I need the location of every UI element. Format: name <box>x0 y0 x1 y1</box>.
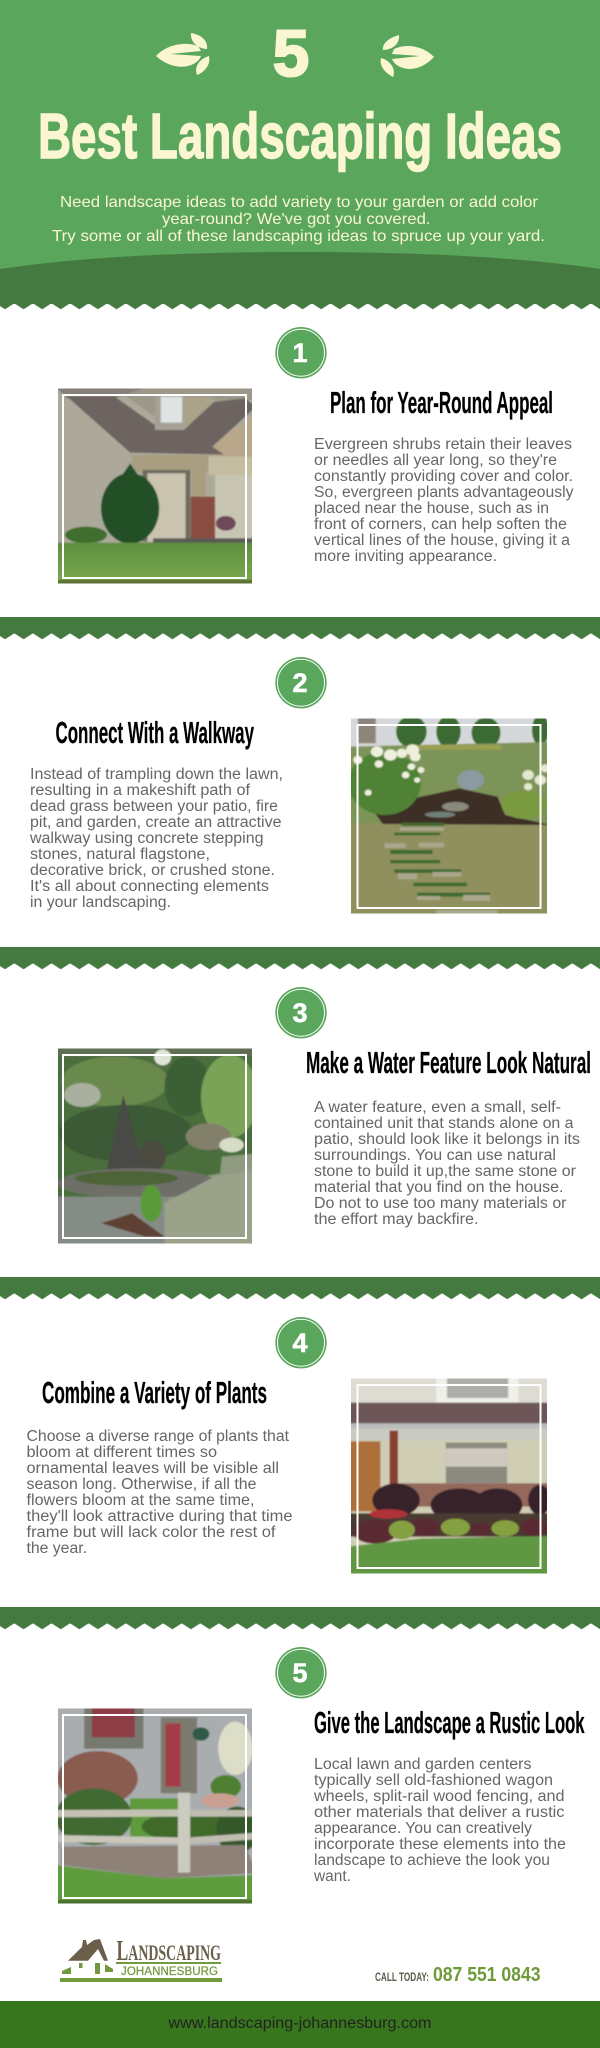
icon: left leaves <box>156 33 209 75</box>
body text 5: wheels, split-rail wood fencing, and <box>313 1788 564 1805</box>
body text 5: incorporate these elements into the <box>314 1836 566 1853</box>
number badge 5: 5 <box>292 1658 308 1688</box>
photo: stone water feature <box>54 1045 258 1248</box>
body text 1: front of corners, can help soften the <box>314 516 567 533</box>
body text 1: placed near the house, such as in <box>314 500 549 517</box>
panel: section 3 <box>54 987 591 1248</box>
icon: right leaves <box>381 35 434 77</box>
photo: split-rail fence <box>54 1705 258 1908</box>
body text 3: the effort may backfire. <box>314 1211 478 1228</box>
footer bar <box>0 2001 600 2048</box>
body text 5: Local lawn and garden centers <box>314 1756 532 1773</box>
body text 4: ornamental leaves will be visible all <box>26 1460 279 1477</box>
number badge 2: 2 <box>292 668 308 698</box>
body text 2: decorative brick, or crushed stone. <box>30 862 275 879</box>
number badge 2 <box>275 657 327 708</box>
intro text: Need landscape ideas to add variety to your garden or add color <box>60 194 539 211</box>
photo frame <box>63 1715 246 1898</box>
photo frame <box>63 1055 246 1238</box>
body text 1: vertical lines of the house, giving it a <box>314 532 570 549</box>
divider band 2 <box>0 947 600 969</box>
number badge 1: 1 <box>292 338 308 368</box>
photo: house with evergreen shrub <box>54 385 256 588</box>
body text 5: appearance. You can creatively <box>314 1820 532 1837</box>
icon: house roof <box>68 1939 108 1961</box>
divider band 3 <box>0 1277 600 1299</box>
logo wordmark: LANDSCAPING <box>116 1936 221 1967</box>
body text 5: landscape to achieve the look you <box>314 1852 550 1869</box>
hero banner <box>0 0 600 309</box>
body text 1: constantly providing cover and color. <box>314 468 573 485</box>
body text 3: patio, should look like it belongs in its <box>314 1131 580 1148</box>
body text 3: surroundings. You can use natural <box>314 1147 556 1164</box>
body text 1: So, evergreen plants advantageously <box>314 484 574 501</box>
body text 4: frame but will lack color the rest of <box>26 1524 276 1541</box>
number badge 3: 3 <box>292 998 308 1028</box>
body text 2: resulting in a makeshift path of <box>30 782 251 799</box>
photo: stepping stone walkway <box>346 715 551 918</box>
hero number: 5 <box>273 16 309 90</box>
body text 1: or needles all year long, so they're <box>314 452 557 469</box>
contact phone: 087 551 0843 <box>433 1964 540 1986</box>
body text 3: A water feature, even a small, self- <box>314 1099 561 1116</box>
body text 2: It's all about connecting elements <box>30 878 269 895</box>
body text 2: in your landscaping. <box>30 894 171 911</box>
photo frame <box>358 1385 540 1568</box>
body text 5 <box>313 1756 566 1885</box>
photo frame <box>358 725 540 908</box>
panel: section 2 <box>29 657 551 918</box>
body text 4 <box>26 1428 292 1557</box>
body text 4: bloom at different times so <box>26 1444 217 1461</box>
body text 4: season long. Otherwise, if all the <box>26 1476 256 1493</box>
logo subline: JOHANNESBURG <box>121 1966 218 1978</box>
body text 4: the year. <box>26 1540 87 1557</box>
number badge 4: 4 <box>292 1328 308 1358</box>
body text 2: stones, natural flagstone, <box>30 846 210 863</box>
heading 4: Combine a Variety of Plants <box>42 1375 267 1410</box>
intro text: year-round? We've got you covered. <box>162 211 430 228</box>
body text 4: flowers bloom at the same time, <box>26 1492 254 1509</box>
number badge 1 <box>275 327 327 378</box>
heading 2: Connect With a Walkway <box>56 715 254 750</box>
body text 3: Do not to use too many materials or <box>314 1195 566 1212</box>
body text 3: contained unit that stands alone on a <box>314 1115 574 1132</box>
body text 5: want. <box>313 1868 351 1885</box>
body text 3 <box>314 1099 580 1228</box>
intro text <box>52 194 545 245</box>
body text 1: Evergreen shrubs retain their leaves <box>314 436 572 453</box>
panel: section 1 <box>54 327 574 588</box>
body text 2: pit, and garden, create an attractive <box>30 814 282 831</box>
photo: porch with mixed plants <box>346 1375 551 1578</box>
body text 4: Choose a diverse range of plants that <box>26 1428 290 1445</box>
panel: section 5 <box>54 1647 585 1908</box>
body text 5: typically sell old-fashioned wagon <box>314 1772 553 1789</box>
body text 2: Instead of trampling down the lawn, <box>30 766 283 783</box>
panel: section 4 <box>26 1317 551 1578</box>
divider band 1 <box>0 617 600 639</box>
body text 3: stone to build it up,the same stone or <box>314 1163 576 1180</box>
body text 2: dead grass between your patio, fire <box>30 798 278 815</box>
body text 2: walkway using concrete stepping <box>29 830 264 847</box>
photo frame <box>63 395 246 578</box>
contact phone: CALL TODAY: <box>375 1970 429 1984</box>
intro text: Try some or all of these landscaping ideas to spruce up your yard. <box>52 228 545 245</box>
number badge 5 <box>275 1647 327 1698</box>
body text 1 <box>314 436 574 565</box>
body text 5: other materials that deliver a rustic <box>314 1804 565 1821</box>
icon: house base <box>62 1963 113 1974</box>
body text 2 <box>29 766 283 911</box>
divider band 4 <box>0 1607 600 1629</box>
number badge 3 <box>275 987 327 1038</box>
number badge 4 <box>275 1317 327 1368</box>
contact phone <box>375 1964 540 1986</box>
body text 1: more inviting appearance. <box>314 548 497 565</box>
body text 4: they'll look attractive during that time <box>26 1508 292 1525</box>
body text 3: material that you find on the house. <box>314 1179 564 1196</box>
logo <box>60 1936 222 1982</box>
footer bar: www.landscaping-johannesburg.com <box>167 2015 432 2032</box>
